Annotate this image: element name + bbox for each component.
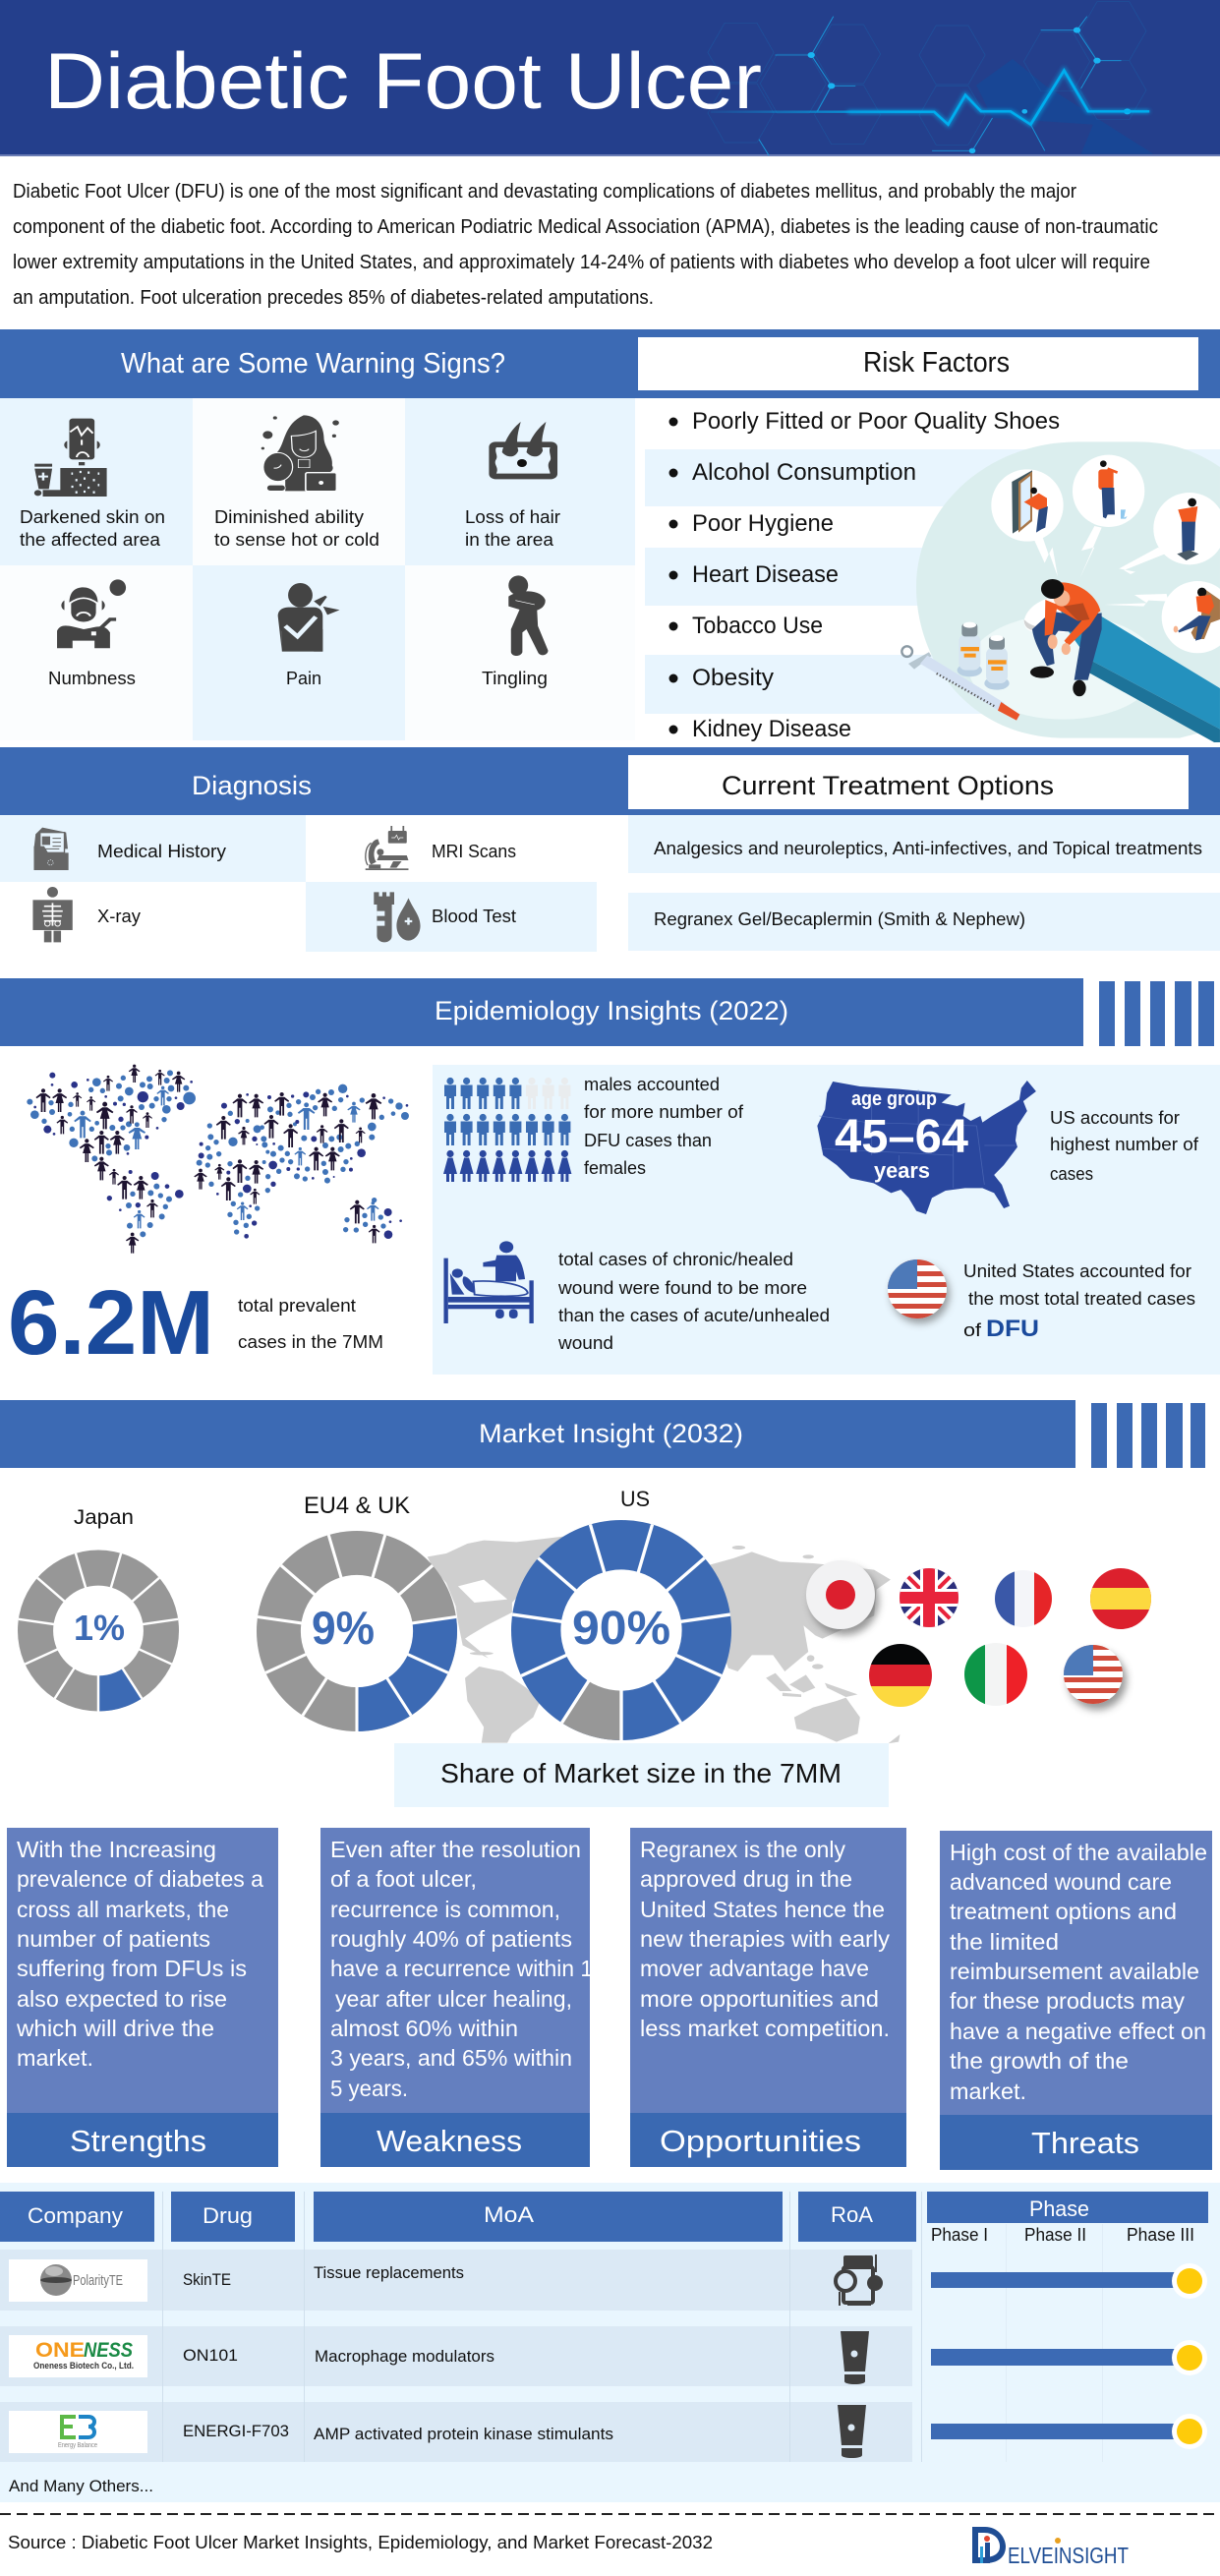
labels bbox=[20, 506, 560, 688]
stat: 6.2M prevalent cases: 6.2M bbox=[8, 1271, 214, 1374]
panel: opportunities: Regranex is the only bbox=[640, 1837, 845, 1862]
drug names: ENERGI-F703 bbox=[183, 2422, 289, 2440]
section band: market insight: Market Insight (2032) bbox=[479, 1419, 743, 1448]
icon: device route bbox=[836, 2254, 883, 2306]
text: males: DFU cases than bbox=[584, 1130, 712, 1150]
donut chart: Japan 1%: Japan bbox=[74, 1506, 134, 1529]
logo: Energy Balance bbox=[9, 2411, 147, 2453]
panel: diagnosis grid: X-ray bbox=[97, 906, 142, 926]
text: males bbox=[584, 1074, 744, 1178]
header band: warning signs and risk factors: Risk Factors bbox=[863, 347, 1010, 379]
panel: threats: the growth of the bbox=[950, 2048, 1129, 2074]
text: US share bbox=[1050, 1107, 1199, 1184]
mini figure at door bbox=[1012, 470, 1048, 534]
icon: numbness bbox=[57, 579, 126, 648]
icon: blood test bbox=[374, 892, 421, 942]
panel: risk factors list: Obesity bbox=[692, 665, 774, 691]
intro paragraph: an amputation. Foot ulceration precedes 85% of diabetes-related amputations. bbox=[13, 287, 654, 309]
mechanisms of action: Macrophage modulators bbox=[315, 2347, 494, 2366]
section band: epidemiology insights: Epidemiology Insights (2022) bbox=[435, 996, 788, 1025]
panel: diagnosis grid bbox=[0, 815, 597, 952]
icon: hospital bed bbox=[443, 1241, 534, 1323]
panel: diagnosis grid: MRI Scans bbox=[432, 841, 516, 861]
labels: Darkened skin on bbox=[20, 506, 165, 527]
icon: male and female pictogram bbox=[443, 1078, 571, 1182]
panel: risk factors list: Tobacco Use bbox=[692, 613, 823, 639]
text: males: females bbox=[584, 1157, 646, 1178]
stat: 6.2M prevalent cases bbox=[8, 1271, 383, 1374]
chart: world map of people and dots bbox=[27, 1065, 409, 1254]
intro paragraph: lower extremity amputations in the United States, and approximately 14-24% of patients with diabetes who develop a foot ulcer will require bbox=[13, 252, 1150, 273]
header band: diagnosis and treatment: Current Treatment Options bbox=[722, 771, 1054, 800]
panel: threats: High cost of the available bbox=[950, 1840, 1207, 1865]
syringe bbox=[901, 646, 1019, 721]
panel: risk factors list: Heart Disease bbox=[692, 561, 839, 588]
panel: weakness: 5 years. bbox=[330, 2076, 408, 2101]
header band: diagnosis and treatment: Diagnosis bbox=[192, 771, 312, 800]
panel: treatment options: Analgesics and neuroleptics, Anti-infectives, and Topical treatments bbox=[654, 838, 1202, 858]
panel: epidemiology facts bbox=[433, 1065, 1220, 1375]
panel: weakness: recurrence is common, bbox=[330, 1897, 560, 1922]
mini figure on chair bbox=[1174, 588, 1220, 641]
labels: Pain bbox=[286, 668, 321, 688]
labels: the affected area bbox=[20, 529, 161, 550]
title: Diabetic Foot Ulcer bbox=[44, 37, 762, 126]
logo: DelveInsight: ELVEINSIGHT bbox=[1008, 2543, 1129, 2568]
icon: US flag badge bbox=[888, 1259, 950, 1323]
panel: weakness: Even after the resolution bbox=[330, 1837, 581, 1862]
intro paragraph: Diabetic Foot Ulcer (DFU) is one of the most significant and devastating complications of diabetes mellitus, and probably the major bbox=[13, 181, 1076, 203]
panel: opportunities: more opportunities and bbox=[640, 1986, 879, 2012]
panel: opportunities: Opportunities bbox=[660, 2124, 861, 2158]
flag: Japan bbox=[806, 1560, 879, 1635]
labels: Loss of hair bbox=[465, 506, 560, 527]
drug names: ON101 bbox=[183, 2346, 238, 2365]
panel: opportunities: less market competition. bbox=[640, 2016, 890, 2041]
text: treated cases bbox=[963, 1260, 1195, 1342]
header band: diagnosis and treatment bbox=[0, 747, 1220, 815]
logo: Oneness bbox=[9, 2335, 147, 2377]
seated man bbox=[1032, 612, 1102, 680]
panel: opportunities bbox=[630, 1828, 906, 2167]
panel: strengths: prevalence of diabetes a bbox=[17, 1866, 263, 1892]
phase sub-headers: Phase III bbox=[1127, 2225, 1194, 2245]
table header row: Company bbox=[28, 2203, 123, 2228]
stat: 6.2M prevalent cases: total prevalent bbox=[238, 1295, 356, 1316]
vials bbox=[958, 622, 1010, 690]
icon: medical history folder bbox=[33, 828, 69, 870]
panel: threats bbox=[940, 1831, 1212, 2170]
panel: strengths: which will drive the bbox=[16, 2016, 214, 2041]
donut chart: US 90% bbox=[511, 1487, 731, 1740]
text: treated cases: United States accounted for bbox=[963, 1260, 1191, 1281]
panel: risk factors list: Kidney Disease bbox=[692, 716, 851, 742]
text: treated cases: DFU bbox=[986, 1316, 1039, 1342]
panel: opportunities: new therapies with early bbox=[640, 1926, 891, 1952]
panel: weakness: almost 60% within bbox=[330, 2016, 518, 2041]
panel: threats: Threats bbox=[1031, 2126, 1139, 2160]
phase sub-headers: Phase I bbox=[931, 2225, 988, 2245]
flag: Germany bbox=[869, 1644, 932, 1708]
text: US share: highest number of bbox=[1050, 1134, 1199, 1154]
flag: France bbox=[995, 1570, 1054, 1627]
panel: weakness: year after ulcer healing, bbox=[335, 1986, 572, 2012]
table header row: Drug bbox=[203, 2203, 253, 2228]
logo: Oneness: ONE bbox=[35, 2339, 85, 2362]
table header row: Phase bbox=[1029, 2196, 1089, 2221]
labels: Numbness bbox=[48, 668, 136, 688]
illustration: patient with diabetic complications bbox=[901, 441, 1220, 745]
panel: warning signs grid bbox=[0, 398, 635, 740]
panel: opportunities: approved drug in the bbox=[640, 1866, 852, 1892]
labels: to sense hot or cold bbox=[214, 529, 379, 550]
table: pipeline drugs bbox=[0, 2183, 1220, 2502]
text: chronic wound: wound bbox=[557, 1332, 613, 1353]
panel: diagnosis grid: Blood Test bbox=[432, 906, 516, 926]
text: chronic wound: total cases of chronic/healed bbox=[558, 1249, 793, 1269]
panel: threats: market. bbox=[950, 2078, 1026, 2104]
header band: warning signs and risk factors: What are Some Warning Signs? bbox=[121, 348, 505, 380]
flag: Spain bbox=[1090, 1568, 1151, 1629]
panel: weakness: roughly 40% of patients bbox=[330, 1926, 572, 1952]
text: males: males accounted bbox=[584, 1074, 720, 1094]
panel: weakness bbox=[320, 1828, 593, 2167]
mechanisms of action: Tissue replacements bbox=[314, 2263, 464, 2282]
text: treated cases: the most total treated cases bbox=[968, 1288, 1195, 1309]
panel: weakness: 3 years, and 65% within bbox=[330, 2045, 572, 2071]
logo: PolarityTE bbox=[9, 2259, 147, 2302]
icon: hair loss bbox=[489, 422, 557, 479]
heartbeat and hexagon graphic bbox=[708, 2, 1153, 155]
source note: Source : Diabetic Foot Ulcer Market Insights, Epidemiology, and Market Forecast-2032 bbox=[8, 2532, 713, 2552]
flag: USA bbox=[1064, 1645, 1127, 1710]
icon: pain bbox=[278, 583, 336, 652]
panel: threats: the limited bbox=[950, 1929, 1059, 1955]
mechanisms of action bbox=[314, 2263, 613, 2443]
panel: risk factors list: Poorly Fitted or Poor Quality Shoes bbox=[692, 408, 1060, 435]
section band: epidemiology insights bbox=[0, 978, 1214, 1046]
text: chronic wound bbox=[557, 1249, 830, 1353]
donut chart: EU4 and UK 9%: EU4 & UK bbox=[304, 1493, 410, 1519]
icon: topical tube bbox=[838, 2405, 866, 2458]
panel: strengths: also expected to rise bbox=[17, 1986, 227, 2012]
text: treated cases: of bbox=[963, 1319, 982, 1340]
panel: weakness: Weakness bbox=[377, 2124, 522, 2158]
panel: diagnosis grid: Medical History bbox=[97, 841, 227, 861]
panel: opportunities: mover advantage have bbox=[640, 1956, 869, 1981]
donut chart: Japan 1%: 1% bbox=[74, 1608, 125, 1648]
donut chart: Japan 1% bbox=[18, 1506, 179, 1711]
icon: diminished sensation bbox=[261, 415, 339, 492]
cushion bbox=[1024, 597, 1065, 632]
donut chart: EU4 and UK 9% bbox=[257, 1493, 457, 1731]
donut chart: EU4 and UK 9%: 9% bbox=[312, 1602, 375, 1654]
callout: share of market size: Share of Market size in the 7MM bbox=[440, 1758, 842, 1788]
icon: MRI scanner bbox=[366, 826, 408, 870]
donut chart: US 90%: US bbox=[620, 1487, 650, 1511]
panel: threats: advanced wound care bbox=[950, 1869, 1172, 1895]
panel: strengths: Strengths bbox=[70, 2124, 206, 2158]
panel: risk factors list bbox=[645, 408, 1220, 742]
table header row bbox=[0, 2192, 1208, 2242]
table header row: RoA bbox=[831, 2202, 873, 2227]
callout: share of market size bbox=[394, 1743, 889, 1807]
phase bars bbox=[931, 2263, 1207, 2449]
drug names: SkinTE bbox=[183, 2270, 231, 2289]
header banner bbox=[0, 0, 1220, 156]
flag: Italy bbox=[964, 1643, 1027, 1706]
panel: strengths: cross all markets, the bbox=[17, 1897, 229, 1922]
panel: risk factors list: Alcohol Consumption bbox=[692, 459, 916, 486]
map: US age group bbox=[817, 1081, 1036, 1214]
icon: tingling bbox=[508, 575, 549, 656]
panel: weakness: of a foot ulcer, bbox=[330, 1866, 477, 1892]
mechanisms of action: AMP activated protein kinase stimulants bbox=[314, 2425, 613, 2443]
intro paragraph bbox=[13, 181, 1158, 309]
panel: threats: for these products may bbox=[950, 1988, 1185, 2014]
panel: weakness: have a recurrence within 1 bbox=[330, 1956, 593, 1981]
icon: topical tube bbox=[841, 2331, 869, 2384]
text: US share: US accounts for bbox=[1050, 1107, 1180, 1128]
header band: warning signs and risk factors bbox=[0, 329, 1220, 398]
map: US age group: 45–64 bbox=[835, 1111, 968, 1163]
panel: strengths: market. bbox=[17, 2045, 93, 2071]
labels: in the area bbox=[465, 529, 554, 550]
flags: seven major markets bbox=[806, 1560, 1151, 1710]
logo: Energy Balance: Energy Balance bbox=[58, 2442, 97, 2449]
mini figure on scale bbox=[1177, 498, 1198, 560]
phase sub-headers: Phase II bbox=[1024, 2225, 1086, 2245]
section band: market insight bbox=[0, 1400, 1205, 1468]
panel: treatment options: Regranex Gel/Becaplermin (Smith & Nephew) bbox=[654, 908, 1025, 929]
labels: Diminished ability bbox=[214, 506, 365, 527]
stat: 6.2M prevalent cases: cases in the 7MM bbox=[238, 1331, 383, 1352]
panel: strengths bbox=[7, 1828, 278, 2167]
text: chronic wound: wound were found to be more bbox=[557, 1277, 807, 1298]
table header row: MoA bbox=[484, 2202, 534, 2227]
logo: Oneness: NESS bbox=[84, 2339, 133, 2362]
map: US age group: years bbox=[874, 1158, 930, 1183]
world map backdrop bbox=[428, 1537, 900, 1743]
panel: risk factors list: Poor Hygiene bbox=[692, 510, 834, 537]
panel: treatment options bbox=[628, 815, 1220, 951]
icon: darkened skin bbox=[34, 419, 107, 497]
panel: threats: treatment options and bbox=[950, 1899, 1177, 1924]
text: chronic wound: than the cases of acute/unhealed bbox=[558, 1305, 830, 1325]
panel: strengths: number of patients bbox=[17, 1926, 210, 1952]
panel: opportunities: United States hence the bbox=[640, 1897, 885, 1922]
phase sub-headers bbox=[931, 2225, 1194, 2245]
panel: threats: have a negative effect on bbox=[950, 2019, 1206, 2044]
mini figure drinking bbox=[1098, 460, 1128, 519]
panel: threats: reimbursement available bbox=[950, 1959, 1199, 1984]
logo: DelveInsight bbox=[972, 2527, 1129, 2568]
icon: x-ray bbox=[32, 887, 73, 942]
panel: strengths: suffering from DFUs is bbox=[17, 1956, 247, 1981]
donut chart: US 90%: 90% bbox=[572, 1603, 670, 1655]
drug names bbox=[183, 2270, 289, 2440]
text: US share: cases bbox=[1050, 1163, 1093, 1184]
speech bubbles bbox=[991, 455, 1220, 653]
intro paragraph: component of the diabetic foot. According to American Podiatric Medical Association (APMA), diabetes is the leading cause of non-traumatic bbox=[13, 216, 1158, 238]
map: US age group: age group bbox=[851, 1088, 937, 1110]
text: males: for more number of bbox=[584, 1101, 744, 1122]
table: pipeline drugs: And Many Others... bbox=[9, 2477, 153, 2495]
panel: strengths: With the Increasing bbox=[17, 1837, 216, 1862]
logo: PolarityTE: PolarityTE bbox=[73, 2272, 123, 2289]
flag: UK bbox=[900, 1568, 959, 1627]
labels: Tingling bbox=[482, 668, 548, 688]
logo: Oneness: Oneness Biotech Co., Ltd. bbox=[33, 2361, 134, 2371]
